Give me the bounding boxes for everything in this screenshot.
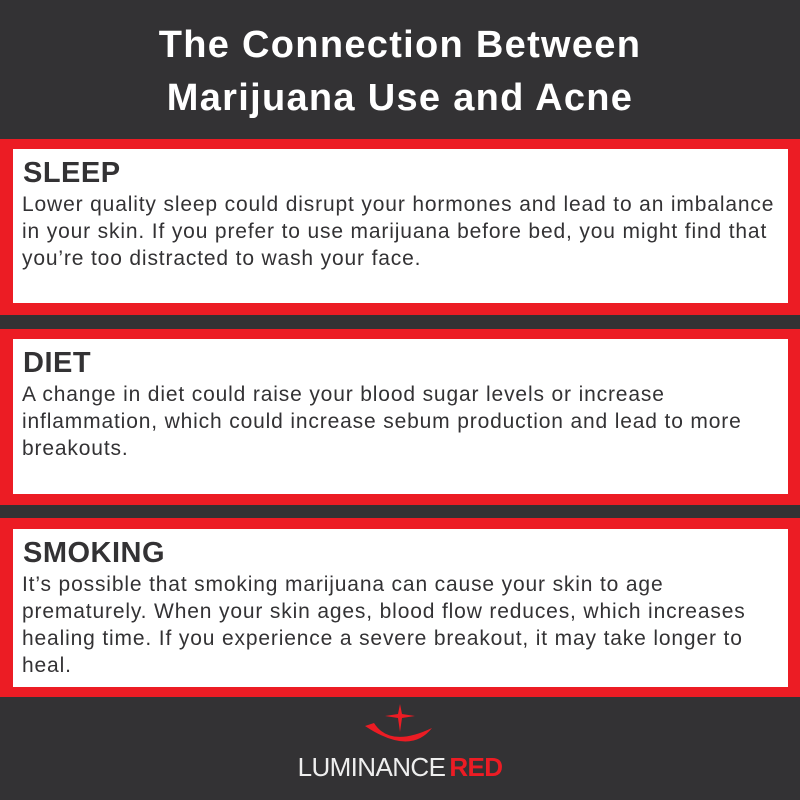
text: smoking: healing time. If you experience a severe breakout, it may take longer to [22, 627, 743, 650]
logo text: LUMINANCERED [298, 752, 502, 782]
title [159, 24, 641, 119]
title: The Connection Between [159, 24, 641, 66]
title: Marijuana Use and Acne [167, 77, 633, 119]
text: sleep: Lower quality sleep could disrupt your hormones and lead to an imbalance [22, 193, 774, 216]
panel: smoking [0, 518, 800, 697]
text: smoking: prematurely. When your skin ages, blood flow reduces, which increases [22, 600, 746, 623]
panel: sleep [0, 139, 800, 315]
text: smoking: heal. [22, 654, 72, 677]
text: sleep: in your skin. If you prefer to use marijuana before bed, you might find that [22, 220, 767, 243]
panel: diet [0, 329, 800, 505]
heading: diet: DIET [23, 347, 91, 379]
text: diet: inflammation, which could increase sebum production and lead to more [22, 410, 742, 433]
heading: smoking: SMOKING [23, 537, 165, 569]
text: sleep: you’re too distracted to wash your face. [22, 247, 421, 270]
text: diet: breakouts. [22, 437, 129, 460]
heading: sleep: SLEEP [23, 157, 121, 189]
logo [298, 704, 502, 782]
text: smoking [22, 573, 746, 677]
icon: logo mark [365, 704, 432, 742]
text: smoking: It’s possible that smoking marijuana can cause your skin to age [22, 573, 663, 596]
text: diet: A change in diet could raise your blood sugar levels or increase [22, 383, 665, 406]
text: sleep [22, 193, 774, 270]
text: diet [22, 383, 742, 460]
